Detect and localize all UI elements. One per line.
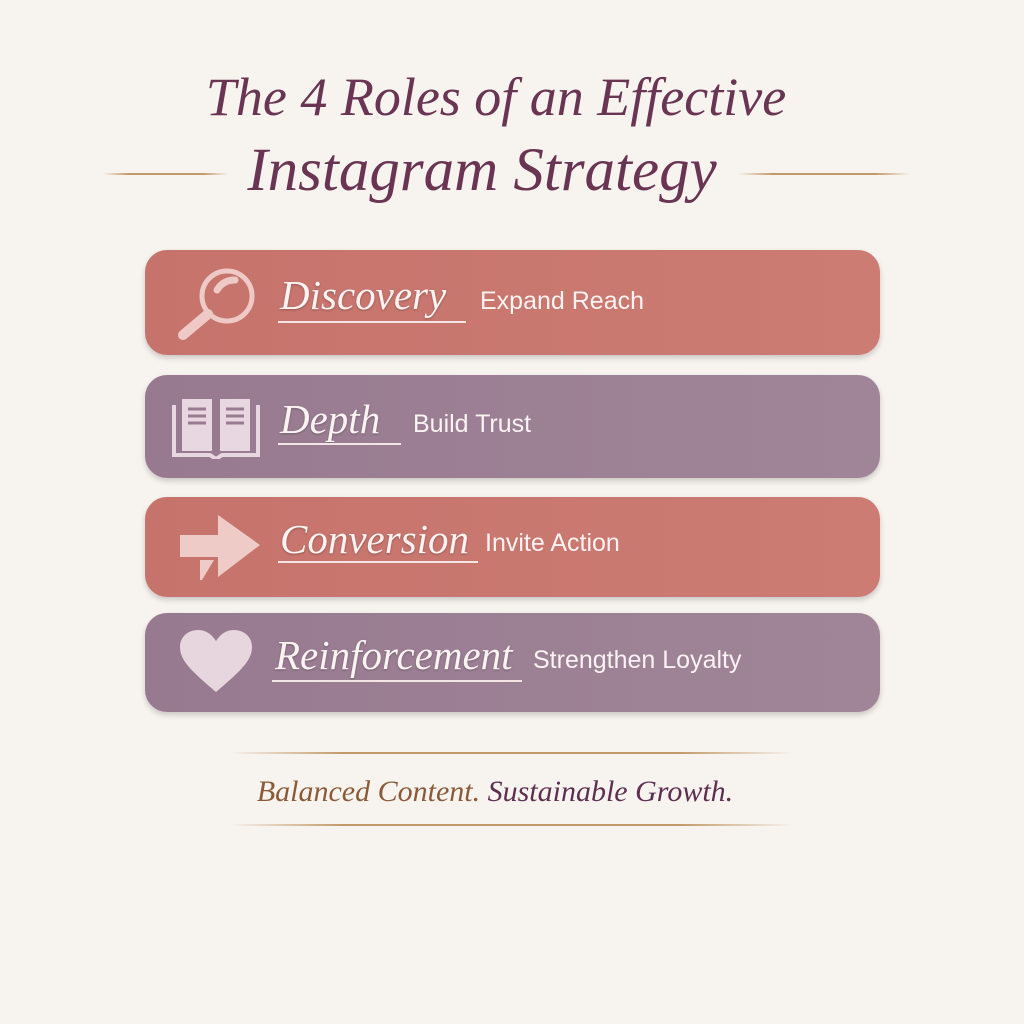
panel: conversion	[145, 497, 880, 597]
title: The 4 Roles of an Effective	[206, 67, 786, 127]
title: Instagram Strategy	[247, 137, 717, 204]
panel: discovery: Discovery	[280, 272, 446, 318]
panel: reinforcement	[145, 613, 880, 712]
title	[104, 67, 908, 204]
panel: reinforcement: Strengthen Loyalty	[533, 646, 741, 674]
panel: depth	[145, 375, 880, 478]
icon: book	[172, 399, 260, 459]
panel: reinforcement: Reinforcement	[275, 632, 513, 678]
panel: depth: Build Trust	[413, 410, 531, 438]
panel: conversion: Invite Action	[485, 529, 620, 557]
footer tagline: Balanced Content. Sustainable Growth.	[257, 775, 733, 808]
panel: depth: Depth	[280, 396, 380, 442]
icon: magnifier	[178, 268, 254, 340]
panel: discovery: Expand Reach	[480, 287, 644, 315]
panel: conversion: Conversion	[280, 516, 469, 562]
panel: discovery	[145, 250, 880, 355]
icon: heart	[180, 630, 252, 692]
icon: arrow	[180, 515, 260, 580]
